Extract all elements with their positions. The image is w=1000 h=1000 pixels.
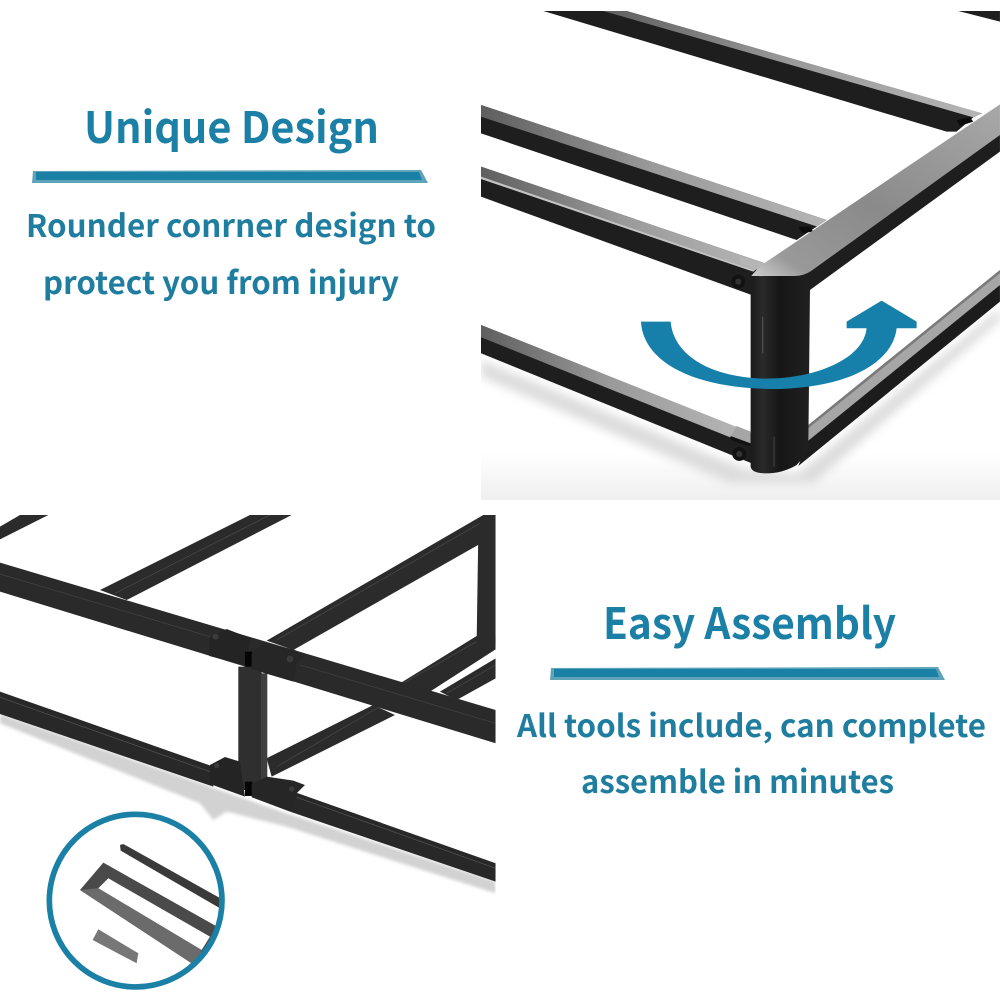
divider bar: Unique Design <box>32 170 428 183</box>
text: rounder corner description: Rounder conrner design to <box>26 201 436 246</box>
panel: unique design text <box>26 94 436 303</box>
floor shadow <box>0 714 496 893</box>
divider bar: Easy Assembly <box>550 667 945 680</box>
arrow: curved blue rotation <box>641 301 917 389</box>
top right silver rail with rounded corner <box>751 104 1000 290</box>
slat highlights <box>115 515 496 767</box>
middle slat <box>481 105 827 240</box>
bolts <box>731 275 746 461</box>
frame bottom side rail <box>481 325 752 463</box>
lower right rail <box>798 270 1000 466</box>
back slat <box>543 11 983 132</box>
long front rail <box>0 563 496 743</box>
floor shadow <box>481 308 1000 500</box>
text: assembly description: All tools include, can complete <box>516 701 986 746</box>
far right slat corner <box>958 11 1000 22</box>
upper joint plates <box>209 629 306 682</box>
panel: easy assembly text <box>516 590 986 802</box>
part bars clipped to circle <box>80 844 223 967</box>
text: rounder corner description: protect you from injury <box>43 258 399 303</box>
lower joint plates <box>210 757 305 812</box>
text: assembly description: assemble in minutes <box>581 757 894 802</box>
heading: Unique Design: Unique Design <box>84 94 379 156</box>
panel: rounded corner frame photo <box>481 11 1000 500</box>
lower front rail <box>0 692 496 882</box>
rounded corner post <box>751 276 810 473</box>
panel: assembly joint frame photo <box>0 515 496 987</box>
heading: Easy Assembly: Easy Assembly <box>603 590 896 652</box>
detail circle: disassembled parts <box>49 814 223 987</box>
frame top side rail <box>481 167 765 295</box>
slats and rear frame <box>0 515 496 777</box>
text: rounder corner description <box>26 201 436 303</box>
centre post <box>238 667 267 790</box>
text: assembly description <box>516 701 986 802</box>
